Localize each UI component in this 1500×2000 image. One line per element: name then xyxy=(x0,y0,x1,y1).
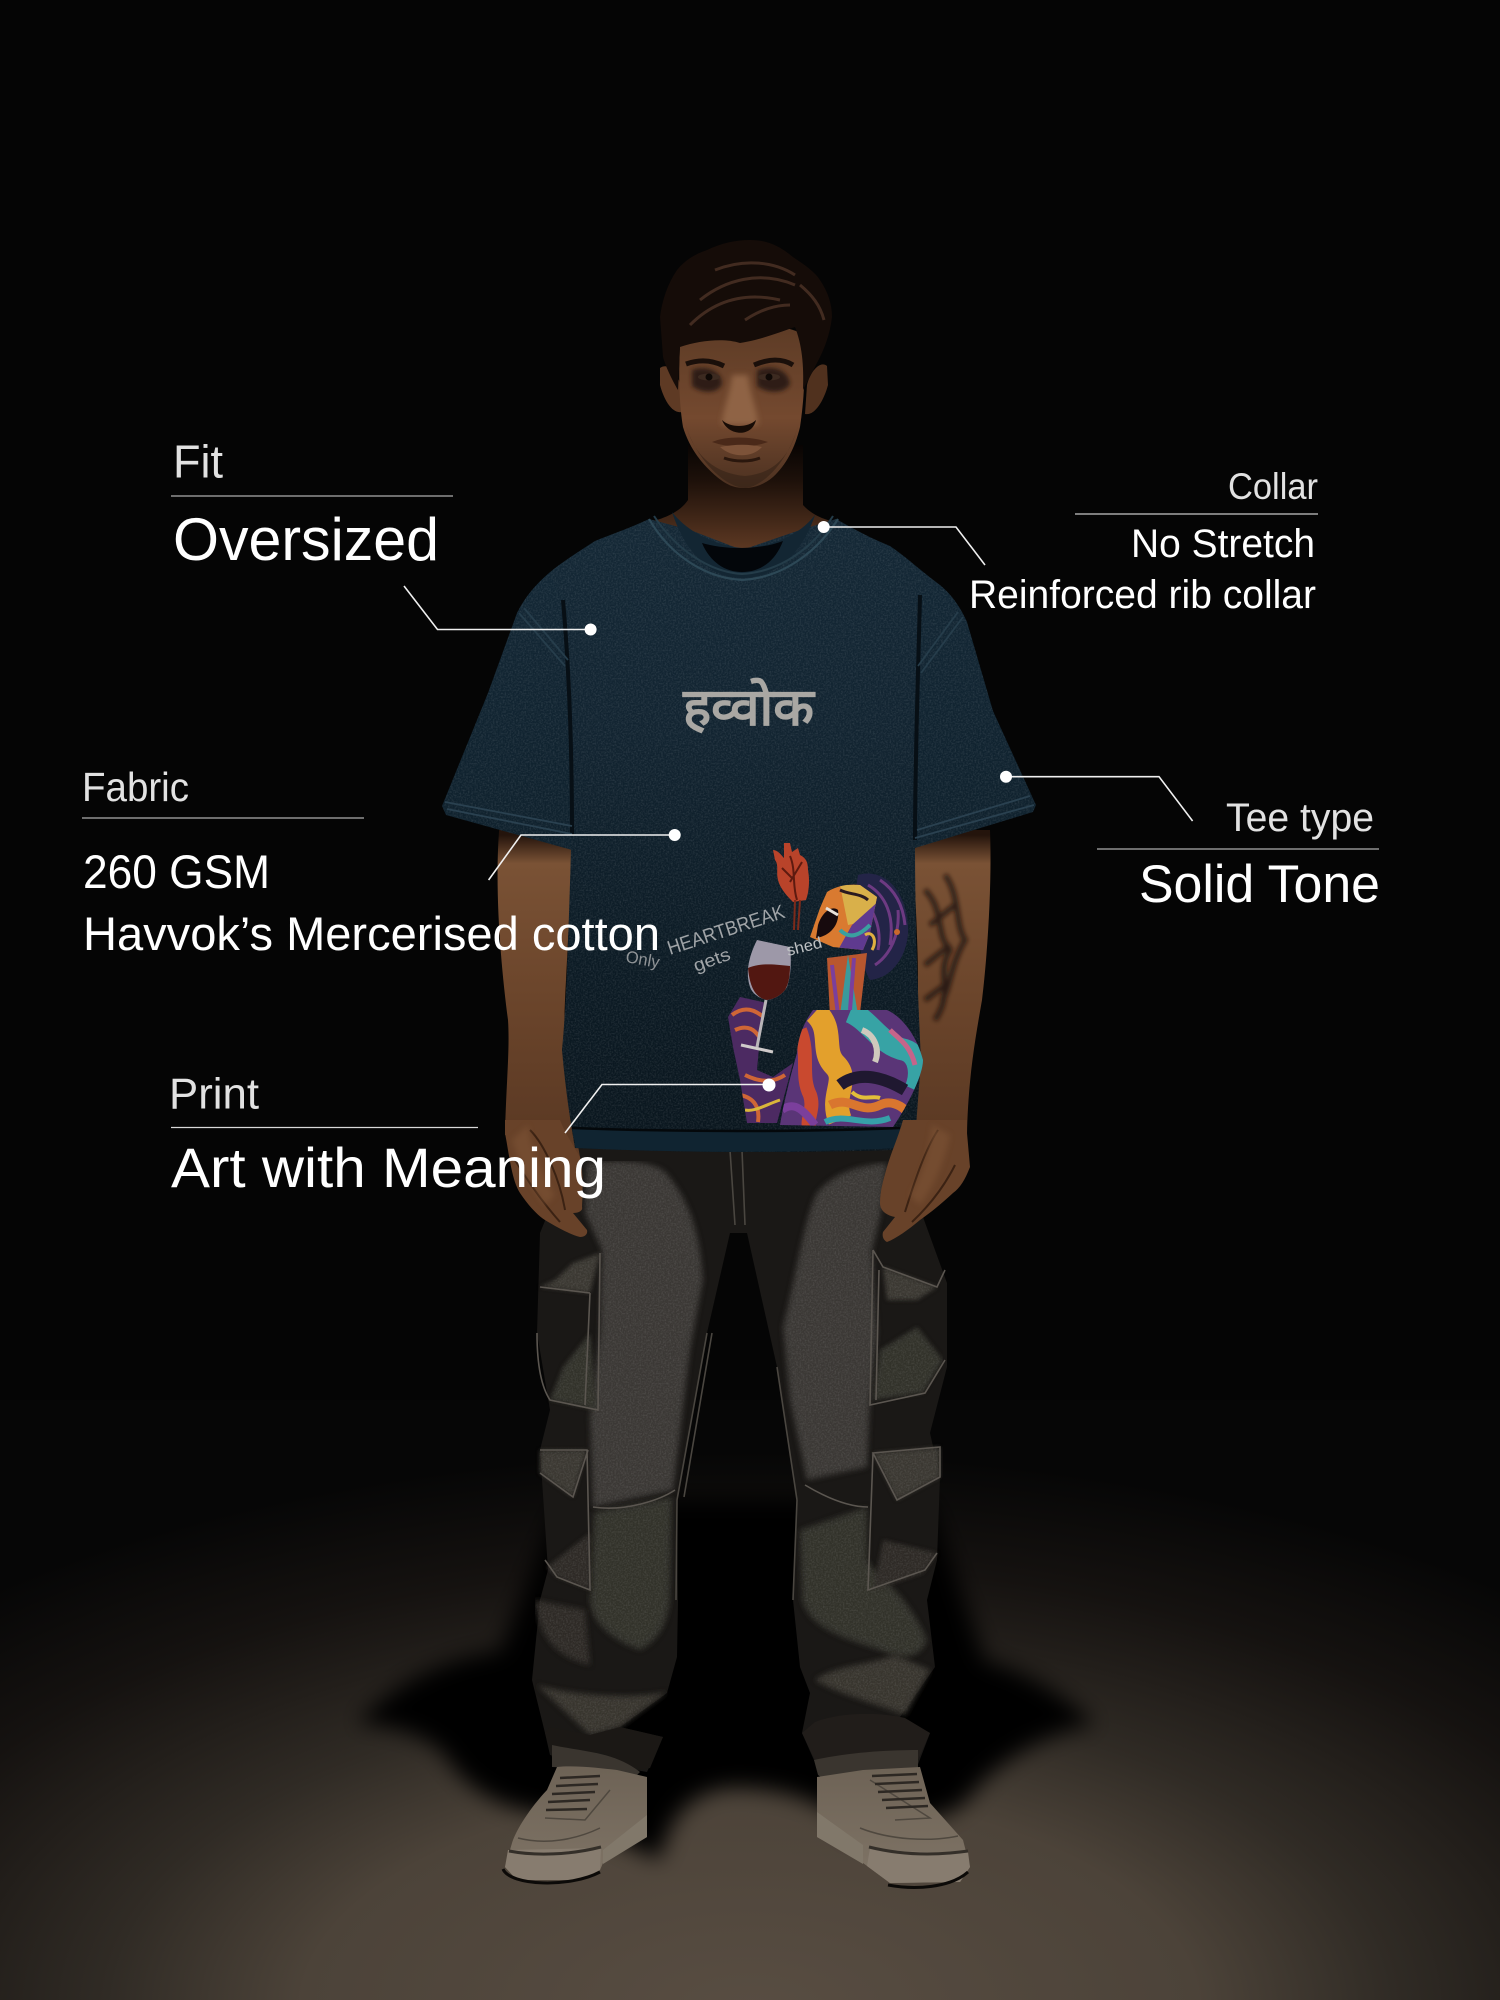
print leader line xyxy=(565,1078,776,1133)
cargo pants xyxy=(532,1140,947,1790)
callout: fabric: Havvok’s Mercerised cotton xyxy=(83,907,660,960)
right hand xyxy=(880,1120,970,1242)
heart xyxy=(773,843,809,930)
fit value: Oversized xyxy=(173,506,439,573)
mouth xyxy=(712,438,768,446)
torso of print figure xyxy=(780,1010,923,1127)
collar leader line xyxy=(818,521,985,565)
tee type value: Solid Tone xyxy=(1139,855,1380,914)
bottom hem xyxy=(572,1128,900,1152)
tee type label: Tee type xyxy=(1226,796,1374,840)
floor spotlight xyxy=(0,1400,1500,2000)
handwritten print text: HEARTBREAK xyxy=(665,901,788,960)
callout: fabric xyxy=(82,764,681,960)
floor shadow xyxy=(357,1500,1095,1860)
sleeve hem stitches xyxy=(445,802,572,834)
neck xyxy=(650,445,835,600)
head xyxy=(660,240,832,488)
cuffs xyxy=(545,1727,663,1770)
eyebrows xyxy=(686,361,724,366)
under-arm folds xyxy=(563,600,572,835)
t-shirt xyxy=(442,512,1036,1152)
eyes xyxy=(698,374,720,380)
arms xyxy=(498,820,991,1157)
handwritten print text: shed xyxy=(785,935,824,960)
pocket lit patches xyxy=(540,1253,600,1293)
callout: collar: Reinforced rib collar xyxy=(969,573,1316,617)
model figure xyxy=(442,240,1036,1887)
left sneaker xyxy=(503,1766,647,1883)
print label: Print xyxy=(169,1070,259,1118)
fit label: Fit xyxy=(173,436,223,488)
left hand xyxy=(505,1120,587,1237)
face of print figure xyxy=(810,884,877,950)
arm tattoo xyxy=(925,875,965,1020)
shoulder seams xyxy=(519,608,568,666)
hands xyxy=(505,1120,970,1242)
body xyxy=(549,519,936,1152)
handwritten print text xyxy=(624,901,824,976)
collar value: No Stretch xyxy=(1131,522,1315,566)
pants base xyxy=(532,1140,947,1772)
hair of print figure xyxy=(856,873,908,980)
neck of print figure xyxy=(827,953,867,1017)
tee type leader line xyxy=(1000,771,1193,821)
arm of print figure xyxy=(728,997,793,1123)
callout: print xyxy=(169,1070,776,1199)
eye shadows xyxy=(692,368,722,392)
chest logo: हव्वोक xyxy=(682,677,816,737)
callout: collar xyxy=(818,466,1318,617)
fabric label: Fabric xyxy=(82,764,189,810)
sleeves xyxy=(442,560,600,850)
fabric value: 260 GSM xyxy=(83,845,270,898)
callout: tee type xyxy=(1000,771,1380,914)
ears xyxy=(660,366,682,412)
thigh and shin lit areas xyxy=(535,1161,943,1735)
handwritten print text: gets xyxy=(691,944,733,976)
fit leader line xyxy=(404,586,597,636)
ear accent xyxy=(865,934,874,950)
hair xyxy=(660,240,832,390)
handwritten print text: Only xyxy=(624,947,662,972)
print value: Art with Meaning xyxy=(171,1136,606,1199)
right sneaker xyxy=(817,1767,970,1887)
nose xyxy=(722,375,758,425)
collar label: Collar xyxy=(1228,466,1318,507)
wine glass xyxy=(741,940,791,1052)
collar opening xyxy=(672,512,815,578)
fabric leader line xyxy=(489,829,681,880)
shirt print: heartbreak illustration xyxy=(624,843,930,1130)
callout: fit xyxy=(171,436,597,636)
sneakers xyxy=(503,1766,970,1887)
face xyxy=(679,325,804,488)
seams and pocket outlines xyxy=(537,1253,675,1590)
stubble shadow xyxy=(686,425,798,488)
